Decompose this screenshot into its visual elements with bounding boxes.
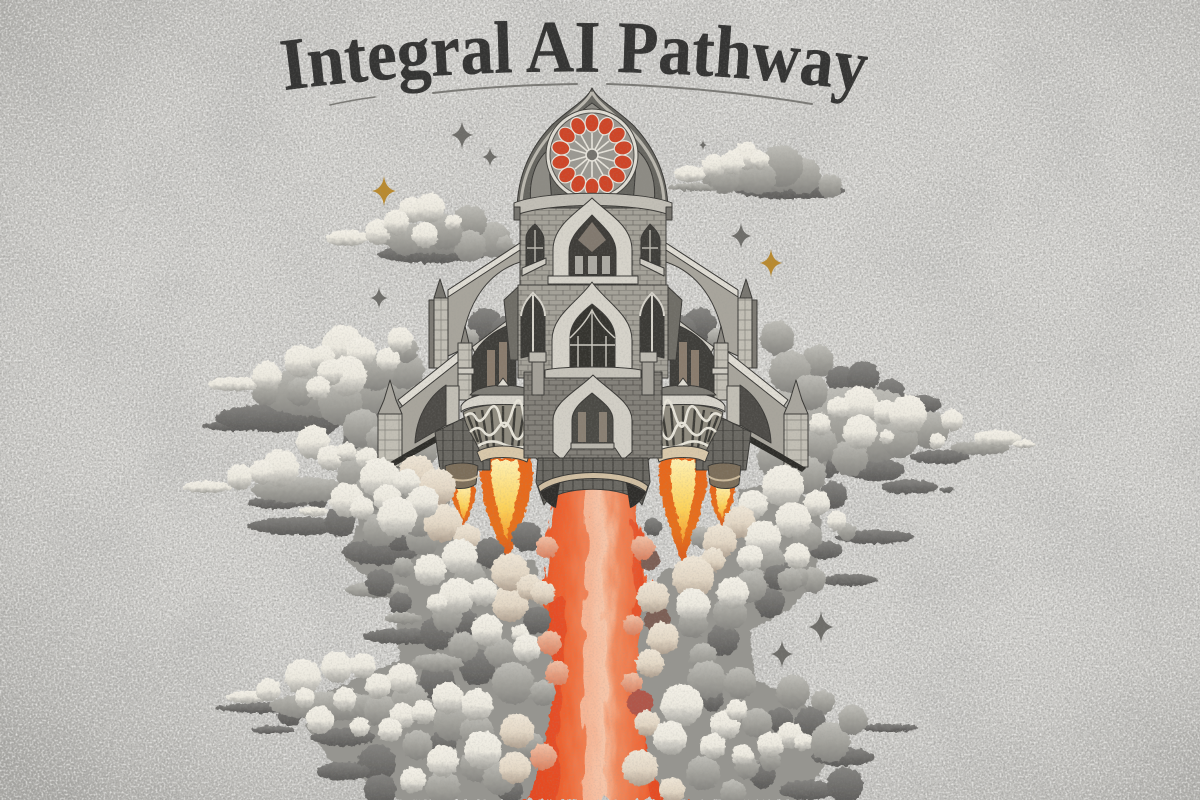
front clouds: left column (345, 522, 569, 706)
dome (517, 88, 668, 208)
side windows upper (526, 224, 544, 266)
cloud: left back cluster (203, 325, 438, 478)
front clouds: left mid (183, 425, 395, 510)
dome collar (514, 193, 672, 216)
front clouds: bottom right (622, 684, 918, 800)
mirrored wing, right (641, 243, 808, 488)
middle central arch window (552, 282, 632, 370)
front clouds: left centre (248, 455, 505, 568)
cloud mass: right body behind puffs (636, 478, 830, 800)
tower lower (518, 285, 668, 378)
tower upper (520, 205, 666, 295)
main exhaust flame (512, 478, 694, 800)
front clouds: right column (622, 556, 835, 716)
rocket cathedral (378, 88, 808, 508)
dark clouds seen through the buttress arches (461, 308, 725, 347)
upper central arch window (553, 198, 632, 277)
title underline flourish (330, 84, 812, 105)
cloud: upper right (668, 142, 845, 199)
cloud mass: left body behind puffs (305, 490, 556, 800)
front clouds: right mid (631, 465, 915, 598)
main nozzle skirt (536, 458, 650, 508)
tower base (524, 372, 662, 470)
ledge (548, 276, 638, 284)
stars (370, 121, 834, 668)
rose window (546, 109, 638, 201)
front clouds: bottom left (216, 651, 556, 800)
side lancet windows lower (521, 293, 664, 358)
cloud: right back cluster (757, 321, 1036, 509)
title: Integral AI Pathway (280, 20, 868, 104)
side rocket flames (451, 458, 735, 565)
cloud: upper left (325, 193, 514, 263)
ledge (545, 367, 641, 378)
wing, left (378, 243, 545, 488)
lower central arch window (553, 375, 632, 460)
